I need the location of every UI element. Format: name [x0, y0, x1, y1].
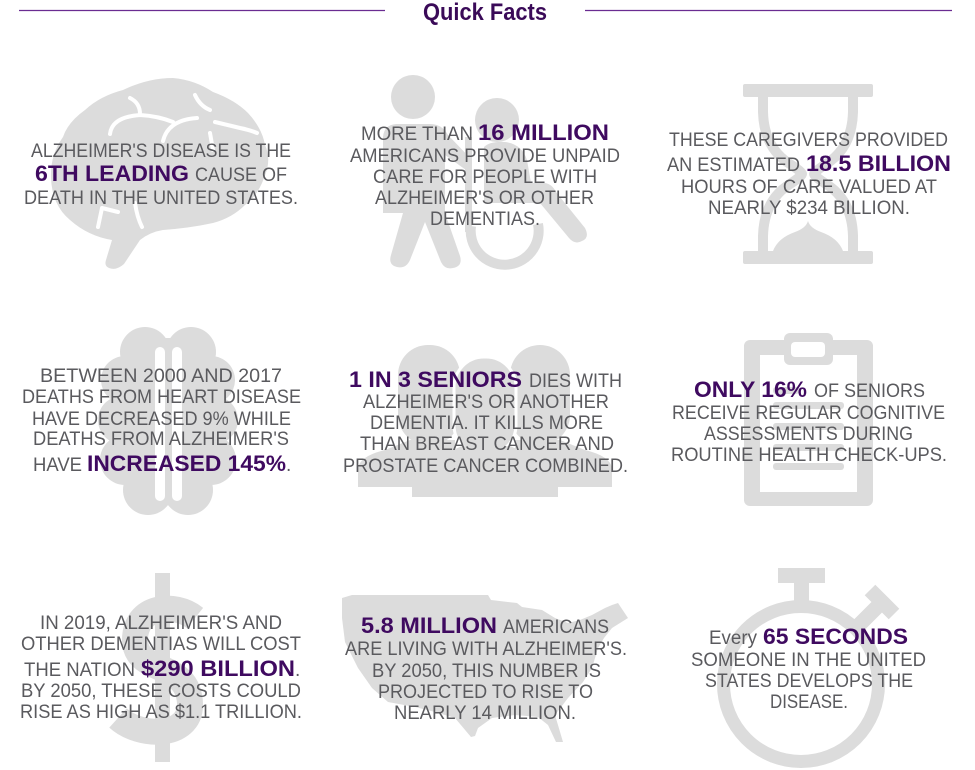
text: deaths increased 145%: DEATHS FROM ALZHEIMER'S: [33, 429, 289, 450]
text: only 16% of seniors: ROUTINE HEALTH CHECK-UPS.: [671, 445, 947, 466]
text: deaths increased 145%: .: [286, 455, 291, 476]
panel: deaths increased 145%: [22, 327, 301, 515]
text: 6th leading cause: ALZHEIMER'S DISEASE IS THE: [31, 141, 291, 162]
text: 5.8 million americans: BY 2050, THIS NUMBER IS: [372, 661, 601, 682]
text: $290 billion cost: .: [295, 660, 300, 681]
text: 16 million caregivers: MORE THAN: [361, 124, 473, 145]
text: 16 million caregivers: [350, 120, 620, 230]
panel: 18.5 billion hours: [667, 84, 951, 264]
text: 6th leading cause: [24, 141, 298, 209]
text: $290 billion cost: RISE AS HIGH AS $1.1 TRILLION.: [20, 702, 302, 723]
text: every 65 seconds: 65 SECONDS: [763, 624, 908, 649]
text: 18.5 billion hours: 18.5 BILLION: [806, 151, 951, 176]
text: every 65 seconds: STATES DEVELOPS THE: [705, 671, 913, 692]
panel: 16 million caregivers: [350, 75, 620, 268]
icon: clipboard: [744, 333, 873, 506]
text: 1 in 3 seniors: 1 IN 3 SENIORS: [349, 367, 522, 392]
icon: stopwatch: [724, 568, 894, 762]
text: 5.8 million americans: NEARLY 14 MILLION.: [394, 703, 576, 724]
text: $290 billion cost: [20, 613, 302, 723]
text: 1 in 3 seniors: PROSTATE CANCER COMBINED.: [343, 456, 628, 477]
text: 18.5 billion hours: NEARLY $234 BILLION.: [708, 198, 910, 219]
text: $290 billion cost: BY 2050, THESE COSTS COULD: [21, 681, 301, 702]
text: 5.8 million americans: 5.8 MILLION: [361, 613, 497, 638]
text: every 65 seconds: Every: [709, 628, 757, 649]
icon: dollar sign: [118, 573, 195, 762]
panel: 1 in 3 seniors: [343, 345, 628, 497]
text: 5.8 million americans: [345, 613, 627, 724]
text: every 65 seconds: SOMEONE IN THE UNITED: [691, 650, 926, 671]
text: 18.5 billion hours: AN ESTIMATED: [667, 155, 800, 176]
text: deaths increased 145%: HAVE: [33, 455, 82, 476]
icon: brain side view: [51, 78, 268, 269]
text: deaths increased 145%: HAVE DECREASED 9% WHILE: [32, 409, 291, 430]
icon: brain top view: [98, 327, 238, 515]
text: 1 in 3 seniors: THAN BREAST CANCER AND: [360, 434, 614, 455]
text: 16 million caregivers: ALZHEIMER'S OR OTHER: [375, 188, 594, 209]
text: $290 billion cost: OTHER DEMENTIAS WILL COST: [21, 634, 301, 655]
text: 6th leading cause: CAUSE OF: [195, 165, 287, 186]
text: 1 in 3 seniors: ALZHEIMER'S OR ANOTHER: [363, 392, 609, 413]
icon: hourglass: [743, 84, 873, 264]
text: 18.5 billion hours: [667, 130, 951, 219]
text: 6th leading cause: DEATH IN THE UNITED STATES.: [24, 188, 298, 209]
text: 1 in 3 seniors: DIES WITH: [529, 371, 622, 392]
text: 16 million caregivers: AMERICANS PROVIDE UNPAID: [350, 146, 620, 167]
text: only 16% of seniors: OF SENIORS: [814, 381, 925, 402]
text: only 16% of seniors: ONLY 16%: [694, 377, 807, 402]
text: 5.8 million americans: PROJECTED TO RISE TO: [378, 682, 593, 703]
panel: $290 billion cost: [20, 573, 302, 762]
text: deaths increased 145%: DEATHS FROM HEART DISEASE: [22, 387, 301, 408]
text: deaths increased 145%: [22, 366, 301, 476]
icon: map of the USA: [342, 595, 628, 742]
text: $290 billion cost: $290 BILLION: [141, 656, 295, 681]
text: $290 billion cost: IN 2019, ALZHEIMER'S AND: [40, 613, 282, 634]
panel: 5.8 million americans: [342, 595, 628, 742]
icon: caregiver and wheelchair: [383, 75, 587, 268]
text: 18.5 billion hours: HOURS OF CARE VALUED AT: [681, 177, 937, 198]
text: 5.8 million americans: ARE LIVING WITH ALZHEIMER'S.: [345, 639, 627, 660]
text: every 65 seconds: DISEASE.: [770, 692, 848, 713]
text: 18.5 billion hours: THESE CAREGIVERS PROVIDED: [669, 130, 948, 151]
panel: every 65 seconds: [691, 568, 926, 762]
icon: three people: [358, 345, 612, 497]
text: 16 million caregivers: CARE FOR PEOPLE WITH: [373, 167, 597, 188]
text: 1 in 3 seniors: DEMENTIA. IT KILLS MORE: [370, 413, 603, 434]
panel: 6th leading cause: [24, 78, 298, 269]
text: only 16% of seniors: RECEIVE REGULAR COGNITIVE: [672, 403, 945, 424]
text: only 16% of seniors: ASSESSMENTS DURING: [704, 424, 913, 445]
panel: only 16% of seniors: [671, 333, 947, 506]
text: every 65 seconds: [691, 624, 926, 713]
text: $290 billion cost: THE NATION: [24, 660, 135, 681]
text: 16 million caregivers: 16 MILLION: [478, 120, 609, 145]
text: 16 million caregivers: DEMENTIAS.: [430, 209, 540, 230]
text: 6th leading cause: 6TH LEADING: [35, 161, 189, 186]
text: deaths increased 145%: INCREASED 145%: [87, 451, 286, 476]
text: 1 in 3 seniors: [343, 367, 628, 477]
text: only 16% of seniors: [671, 377, 947, 466]
text: deaths increased 145%: BETWEEN 2000 AND 2017: [40, 366, 282, 387]
text: 5.8 million americans: AMERICANS: [503, 617, 609, 638]
